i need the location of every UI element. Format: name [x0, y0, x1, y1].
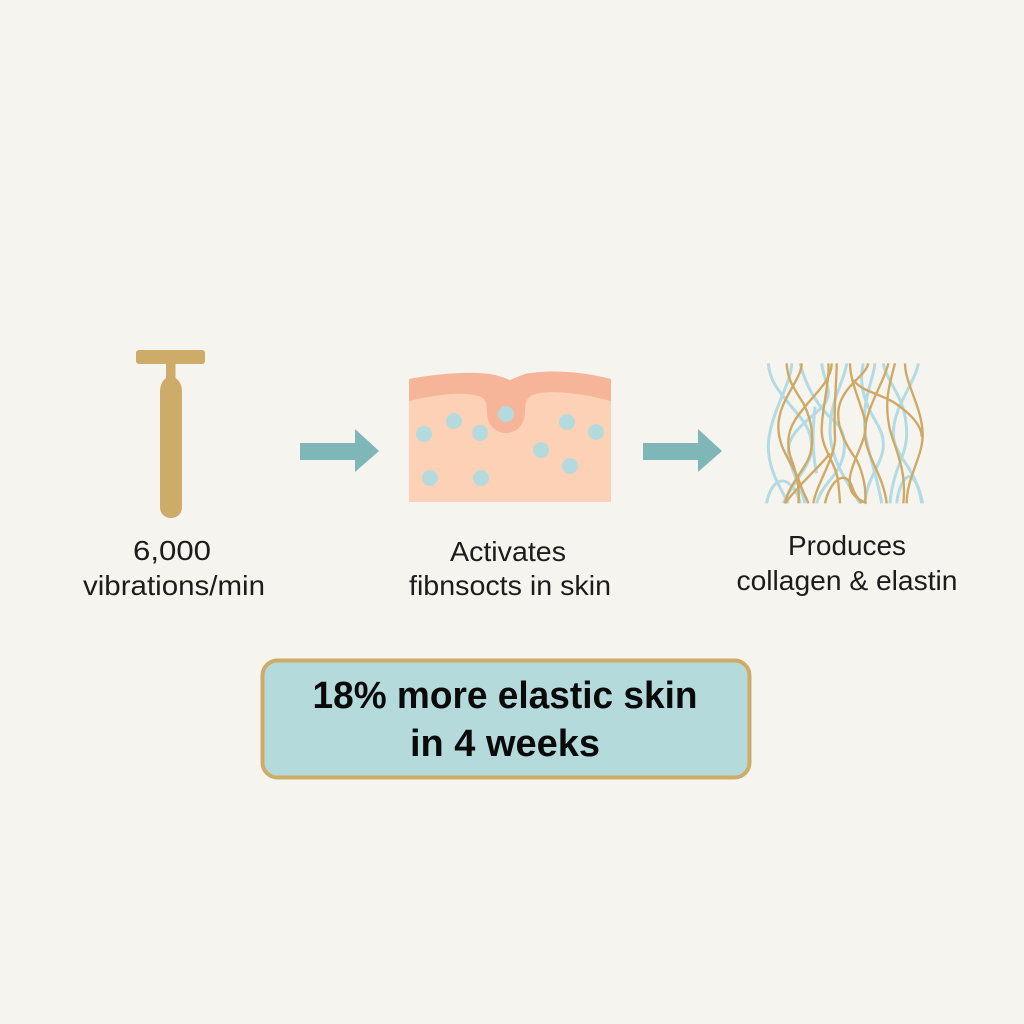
icon: vibration device [136, 350, 205, 518]
arrow: skin to fibers [643, 429, 722, 472]
label: vibrations: 6,000 [133, 535, 211, 566]
label: activates: Activates [450, 536, 566, 567]
callout: result [262, 660, 750, 778]
label: produces [736, 530, 958, 596]
arrow: device to skin [300, 429, 379, 472]
icon: collagen and elastin fibers [767, 363, 923, 503]
callout: result: 18% more elastic skin [312, 675, 698, 717]
icon: skin cross-section [409, 372, 611, 502]
callout: result: in 4 weeks [410, 723, 600, 765]
label: activates [409, 536, 611, 601]
label: produces: Produces [788, 530, 906, 561]
label: vibrations [83, 535, 265, 601]
label: vibrations: vibrations/min [83, 570, 265, 601]
label: produces: collagen & elastin [736, 565, 958, 596]
fibroblast dots [416, 406, 604, 486]
label: activates: fibnsocts in skin [409, 570, 611, 601]
